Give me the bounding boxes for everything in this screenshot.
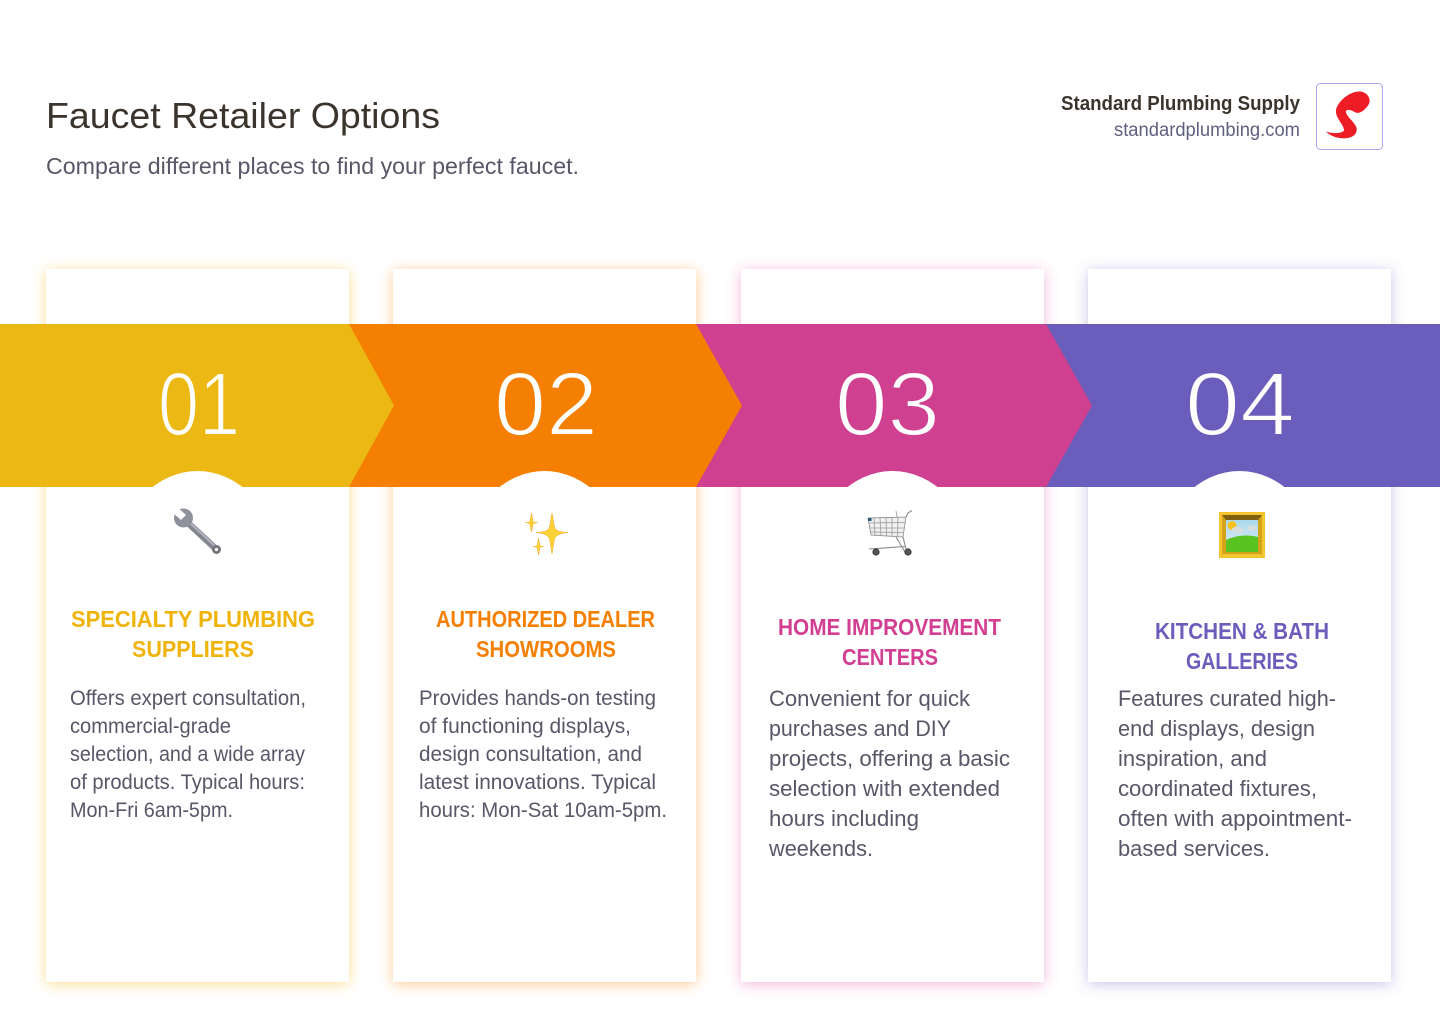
card heading: SUPPLIERS xyxy=(132,636,254,662)
arrow: step 03: 03 xyxy=(835,355,940,455)
arrow: step 01 xyxy=(0,324,394,487)
card body text: weekends. xyxy=(768,836,873,861)
card heading: HOME IMPROVEMENT xyxy=(778,614,1001,640)
panel: authorized dealer showrooms xyxy=(393,269,696,982)
brand url: standardplumbing.com xyxy=(1114,120,1300,141)
card body text xyxy=(70,687,306,822)
card heading: GALLERIES xyxy=(1186,648,1298,674)
title: Faucet Retailer Options xyxy=(46,95,440,136)
icon: wrench xyxy=(172,506,221,554)
card body text: of products. Typical hours: xyxy=(70,771,305,794)
arrow: step 03 xyxy=(650,324,1092,487)
arrow: step 04: 04 xyxy=(1185,355,1295,455)
logo box xyxy=(1316,84,1382,150)
icon caps xyxy=(152,471,1284,487)
icon: red S logo xyxy=(1326,91,1370,138)
subtitle: Compare different places to find your perfect faucet. xyxy=(46,153,579,179)
card body text: Convenient for quick xyxy=(769,686,971,711)
card background xyxy=(741,269,1044,982)
card heading: AUTHORIZED DEALER xyxy=(436,606,655,632)
card body text: latest innovations. Typical xyxy=(419,771,656,794)
card body text xyxy=(1118,686,1352,861)
card body text: Mon-Fri 6am-5pm. xyxy=(70,799,233,822)
brand block xyxy=(1061,84,1382,150)
icon: sparkles xyxy=(526,513,568,555)
card background xyxy=(46,269,349,982)
card body text: Offers expert consultation, xyxy=(70,687,306,710)
arrow: step 01: 01 xyxy=(158,355,240,455)
card body text: selection with extended xyxy=(769,776,1000,801)
panel: home improvement centers xyxy=(741,269,1044,982)
card heading xyxy=(778,614,1001,670)
card body text: Provides hands-on testing xyxy=(419,687,656,710)
card body text: based services. xyxy=(1118,836,1270,861)
arrow band xyxy=(0,324,1440,487)
card background xyxy=(393,269,696,982)
arrow: step 02 xyxy=(300,324,742,487)
card heading xyxy=(1155,618,1329,674)
card body text xyxy=(419,687,667,822)
arrow: step 02: 02 xyxy=(494,355,598,455)
card body text: design consultation, and xyxy=(419,743,642,766)
card heading xyxy=(436,606,655,662)
panel: kitchen and bath galleries xyxy=(1088,269,1391,982)
card body text: Features curated high- xyxy=(1118,686,1336,711)
card body text: often with appointment- xyxy=(1118,806,1352,831)
card body text: commercial-grade xyxy=(70,715,231,738)
card body text: coordinated fixtures, xyxy=(1118,776,1317,801)
card background xyxy=(1088,269,1391,982)
card body text: of functioning displays, xyxy=(419,715,631,738)
card body text: hours including xyxy=(769,806,919,831)
icon: framed picture xyxy=(1219,512,1265,558)
brand name: Standard Plumbing Supply xyxy=(1061,93,1301,115)
card heading: SPECIALTY PLUMBING xyxy=(71,606,315,632)
icon: shopping cart xyxy=(868,510,912,555)
card heading xyxy=(71,606,315,662)
panel: specialty plumbing suppliers xyxy=(46,269,349,982)
card body text: hours: Mon-Sat 10am-5pm. xyxy=(419,799,667,822)
card body text xyxy=(768,686,1010,861)
card body text: inspiration, and xyxy=(1118,746,1267,771)
card body text: end displays, design xyxy=(1118,716,1315,741)
card heading: CENTERS xyxy=(842,644,938,670)
card heading: KITCHEN & BATH xyxy=(1155,618,1329,644)
arrow: step 04 xyxy=(1000,324,1440,487)
card heading: SHOWROOMS xyxy=(476,636,616,662)
card body text: projects, offering a basic xyxy=(769,746,1010,771)
card body text: selection, and a wide array xyxy=(70,743,305,766)
card body text: purchases and DIY xyxy=(769,716,951,741)
